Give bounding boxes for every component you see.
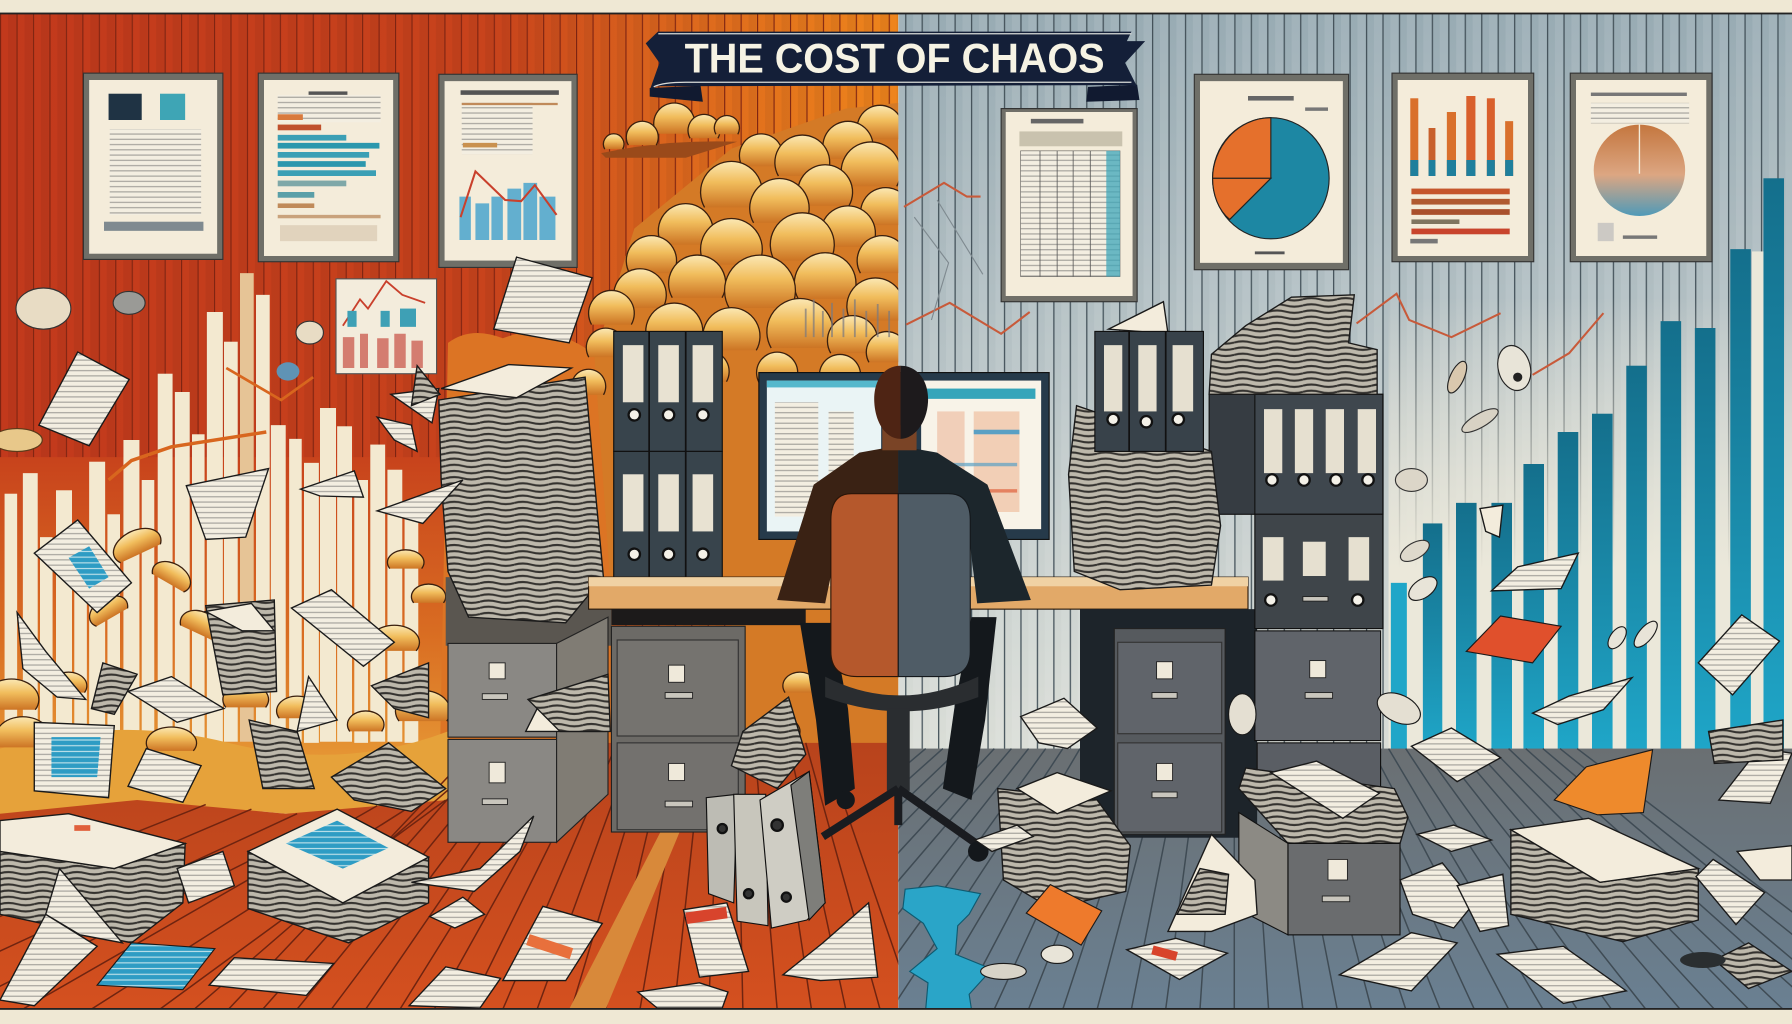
left wall	[0, 14, 898, 768]
filing cabinet under desk, left	[611, 626, 745, 832]
falling bar chart, cream bars	[0, 273, 448, 811]
lower golden debris	[0, 521, 817, 817]
scattered papers, left side	[0, 352, 878, 1008]
left wooden floor	[0, 743, 914, 1009]
cloud of chaos	[571, 103, 911, 395]
head	[874, 366, 928, 450]
red trend lines on the grey wall	[904, 183, 1603, 375]
filing cabinet, tilted left	[446, 577, 611, 842]
poster: column and bar charts	[1392, 73, 1534, 262]
person at desk in split chair	[777, 366, 1031, 862]
binders on desk, left stacks	[614, 331, 722, 586]
right grey floor	[898, 748, 1792, 1008]
legs	[800, 617, 997, 806]
poster: pie chart	[1194, 74, 1349, 270]
title text: THE COST OF CHAOS	[685, 35, 1105, 82]
spilled water	[903, 886, 992, 1009]
poster: horizontal bar report	[258, 73, 399, 262]
falling wall report sheet	[494, 257, 592, 343]
orange cloud backdrop	[440, 103, 898, 754]
poster: text report with icons	[83, 73, 223, 259]
right paper stack on desk	[1069, 406, 1221, 590]
rising bar chart, teal bars	[1389, 178, 1792, 750]
chart trend lines on the red wall	[109, 368, 313, 480]
panel: chaotic left side	[0, 14, 914, 1009]
right wall	[898, 14, 1792, 768]
tall paper stack on the left	[439, 365, 603, 623]
binders on floor	[706, 771, 825, 928]
title banner: The Cost of Chaos	[646, 32, 1145, 102]
poster: data table	[1001, 109, 1137, 302]
small pinned chart paper	[336, 279, 437, 374]
paper pile on right tower	[1209, 295, 1377, 394]
paper stacks on the right floor	[998, 761, 1698, 942]
poster: faded pie chart	[1570, 73, 1712, 262]
binders on desk, right	[1095, 302, 1203, 451]
chair back and seat	[823, 494, 989, 862]
paper stacks on the left floor	[0, 809, 429, 943]
jacket	[777, 446, 1031, 603]
poster: report with falling line chart	[439, 74, 577, 267]
desk	[589, 577, 1257, 838]
wall-mounted items on the left	[0, 288, 440, 451]
computer monitor	[759, 373, 1049, 539]
scattered papers, right side	[975, 342, 1792, 1003]
filing cabinet under desk, right	[1114, 629, 1225, 834]
panel: orderly right side	[898, 14, 1792, 1008]
right cabinet tower with binders	[1209, 394, 1383, 800]
